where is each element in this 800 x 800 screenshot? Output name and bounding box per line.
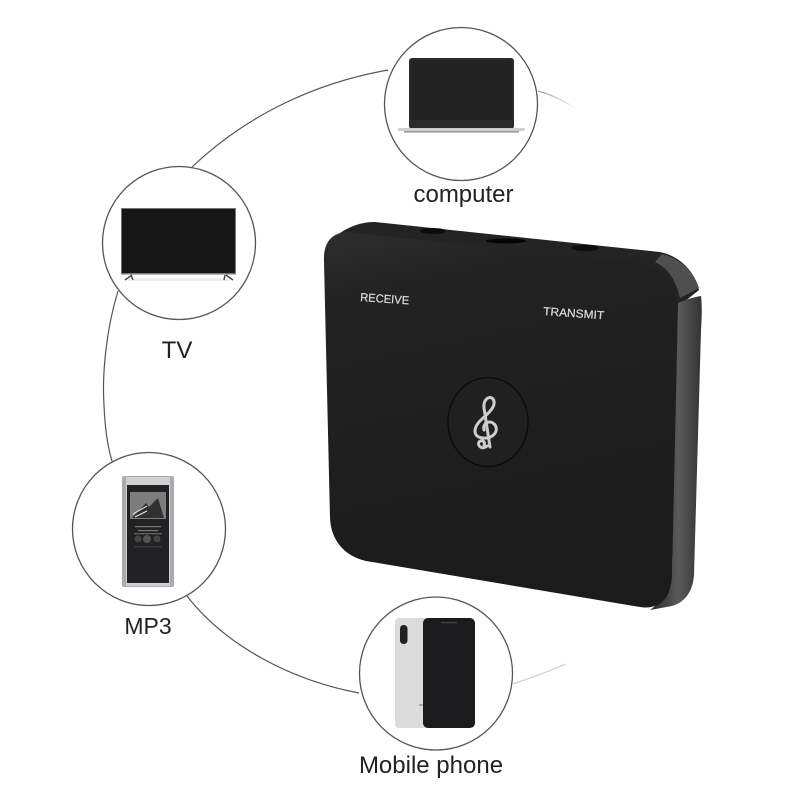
product: audio transmitter receiver xyxy=(324,222,702,610)
TV device circle xyxy=(102,166,256,320)
label: Mobile phone: Mobile phone xyxy=(359,752,503,779)
icon: phones xyxy=(395,618,475,728)
icon: treble clef xyxy=(475,397,496,448)
icon: TV xyxy=(121,208,236,281)
label: TV: TV xyxy=(162,337,192,364)
label: RECEIVE: RECEIVE xyxy=(360,292,410,307)
label: MP3: MP3 xyxy=(124,613,172,639)
MP3 device circle xyxy=(72,452,226,606)
device front face xyxy=(324,232,678,607)
connecting arcs xyxy=(104,70,578,693)
device right side xyxy=(650,296,702,610)
device top edge with ports xyxy=(340,222,699,306)
computer device circle xyxy=(384,28,538,180)
label: TRANSMIT: TRANSMIT xyxy=(543,306,604,322)
button with treble clef xyxy=(448,378,528,466)
icon: MP3 player xyxy=(122,476,174,587)
mobile phone device circle xyxy=(360,597,512,750)
icon: laptop xyxy=(398,58,525,133)
label: computer: computer xyxy=(413,181,514,208)
